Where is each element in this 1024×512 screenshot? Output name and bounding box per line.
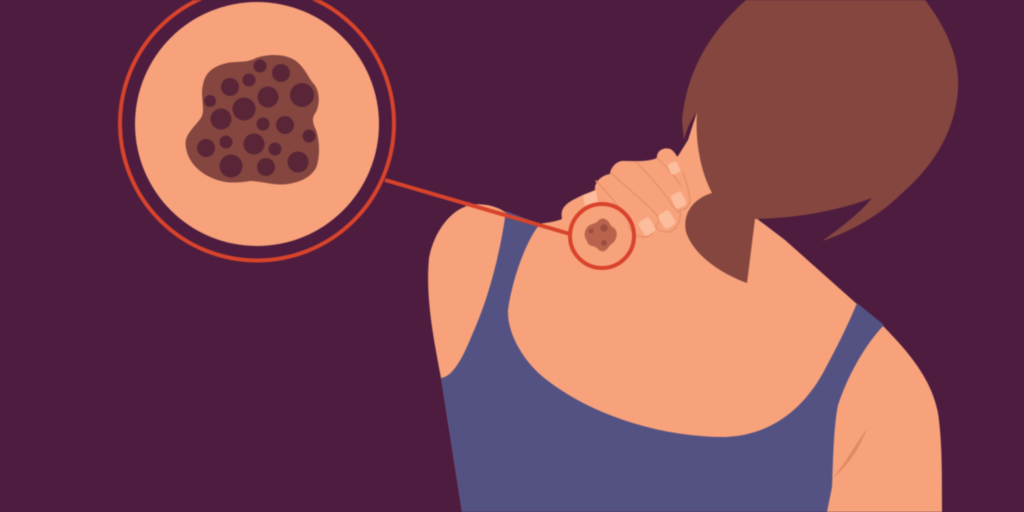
big magnified circle <box>120 0 394 260</box>
finger outlines <box>596 158 690 237</box>
arm crease <box>833 428 867 478</box>
skin disc <box>135 2 379 246</box>
hair <box>682 0 958 283</box>
blue tank top <box>441 211 884 512</box>
mole body <box>186 55 319 184</box>
hand silhouette <box>562 148 690 237</box>
outer red ring <box>120 0 394 260</box>
hand on neck <box>562 148 690 237</box>
skin: back, neck and arms <box>428 112 942 512</box>
small lesion on neck <box>585 219 617 251</box>
mole <box>186 55 319 184</box>
small red magnifier ring <box>570 204 634 268</box>
mole spots <box>197 60 316 178</box>
fingernails <box>583 161 687 237</box>
connector line <box>385 180 570 234</box>
woman figure <box>428 0 958 512</box>
